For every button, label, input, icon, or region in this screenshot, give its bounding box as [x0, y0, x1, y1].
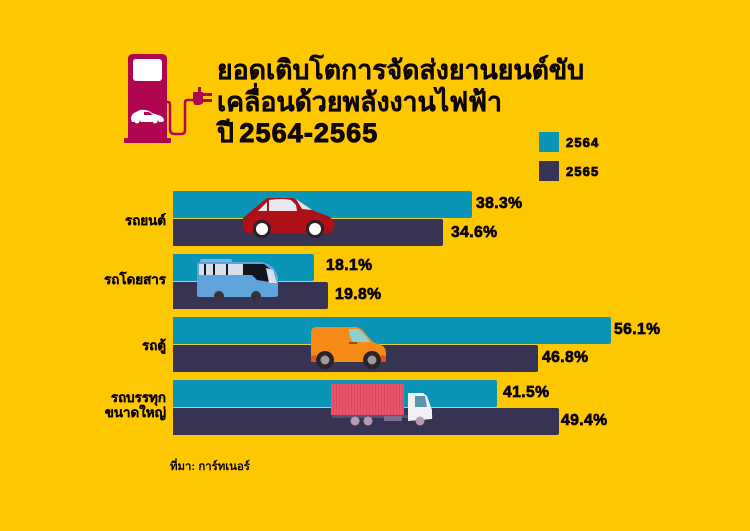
label: รถโดยสาร [104, 272, 166, 287]
label: ขนาดใหญ่ [105, 405, 166, 420]
bar 2564 [173, 254, 314, 281]
title: ปี 2564-2565 [217, 118, 378, 148]
icon: container truck [331, 384, 433, 426]
bar 2565 [173, 219, 443, 246]
legend item: 2564 [539, 132, 599, 152]
value 38.3: 38.3% [476, 195, 522, 212]
value 34.6: 34.6% [451, 224, 497, 241]
icon: charging station [124, 54, 212, 143]
bar 2565 [173, 408, 559, 435]
label: รถตู้ [142, 338, 166, 353]
legend item: 2565 [539, 161, 599, 181]
title: ยอดเติบโตการจัดส่งยานยนต์ขับ [217, 55, 584, 85]
legend item: 2564: 2564 [566, 135, 599, 150]
bar 2564 [173, 380, 497, 407]
value 56.1: 56.1% [614, 321, 660, 338]
value 18.1: 18.1% [326, 257, 372, 274]
bar 2564 [173, 191, 472, 218]
value 49.4: 49.4% [561, 412, 607, 429]
icon: blue bus [197, 259, 278, 301]
label [104, 390, 166, 420]
value 46.8: 46.8% [542, 349, 588, 366]
bar 2565 [173, 345, 538, 372]
title [216, 54, 584, 148]
label: รถบรรทุก [111, 390, 166, 405]
icon: orange van [311, 327, 386, 369]
source note: ที่มา: การ์ทเนอร์ [170, 461, 250, 473]
legend item: 2565: 2565 [566, 164, 599, 179]
value 19.8: 19.8% [335, 286, 381, 303]
bar 2565 [173, 282, 328, 309]
legend [539, 132, 599, 181]
label: รถยนต์ [125, 213, 166, 228]
bar chart [104, 191, 660, 435]
title: เคลื่อนด้วยพลังงานไฟฟ้า [217, 86, 502, 116]
bar 2564 [173, 317, 611, 344]
icon: red car [243, 198, 335, 238]
value 41.5: 41.5% [503, 384, 549, 401]
